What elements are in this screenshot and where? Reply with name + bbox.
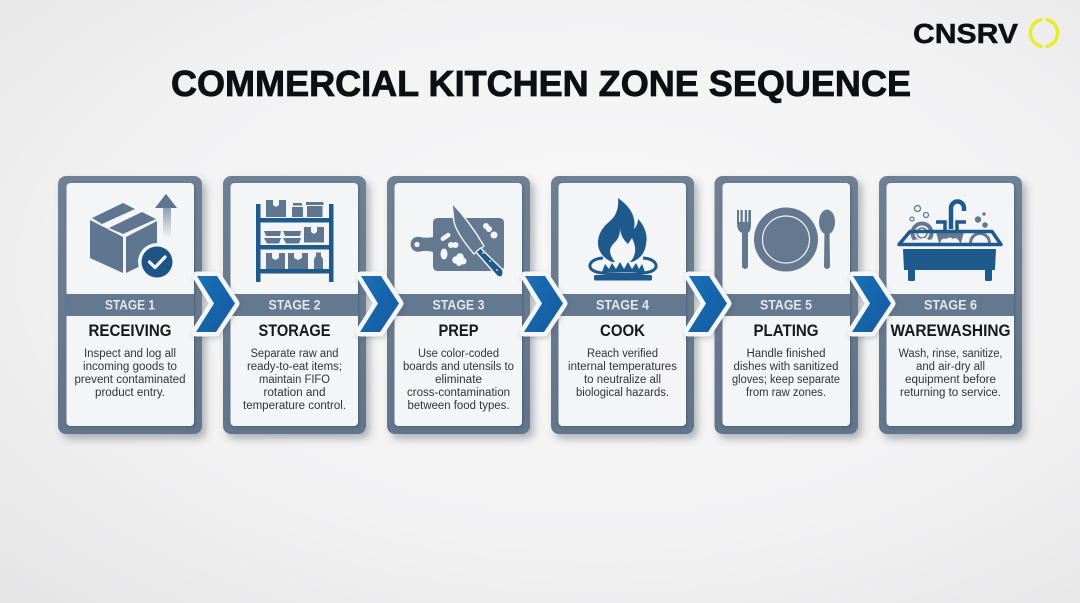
icon: plate fork and spoon	[737, 208, 835, 272]
card frame	[879, 176, 1022, 434]
arrow: stage 4 to 5	[688, 276, 727, 332]
stage label: STAGE 4	[596, 298, 649, 312]
panel: stage 4 cook	[551, 176, 694, 434]
card frame	[714, 176, 858, 434]
card frame	[387, 176, 530, 434]
description: biological hazards.	[576, 387, 669, 399]
card inner	[722, 183, 850, 426]
zone name: PREP	[438, 322, 478, 340]
logo wordmark: CNSRV	[913, 18, 1018, 49]
stage band	[722, 294, 850, 316]
card inner	[230, 183, 358, 426]
card inner	[886, 183, 1014, 426]
card frame	[551, 176, 694, 434]
stage label: STAGE 6	[924, 298, 977, 312]
panel: stage 1 receiving	[58, 176, 202, 434]
arrow: stage 2 to 3	[360, 276, 399, 332]
logo: CNSRV	[913, 18, 1058, 49]
description: product entry.	[95, 387, 165, 399]
stage band	[230, 294, 358, 316]
description: Wash, rinse, sanitize,	[898, 348, 1002, 360]
panel: stage 6 warewashing	[879, 176, 1022, 434]
stage band	[558, 294, 686, 316]
description: ready-to-eat items;	[247, 361, 342, 373]
description: cross-contamination	[407, 387, 510, 399]
arrow: stage 3 to 4	[524, 276, 563, 332]
description: Handle finished	[746, 348, 826, 360]
description: returning to service.	[900, 387, 1001, 399]
card inner	[394, 183, 522, 426]
zone name: STORAGE	[258, 322, 330, 340]
description	[403, 348, 514, 412]
description: dishes with sanitized	[734, 361, 838, 373]
icon: cutting board and knife	[411, 203, 504, 277]
stage band	[886, 294, 1014, 316]
description	[74, 348, 186, 399]
stage band	[66, 294, 194, 316]
description	[243, 348, 346, 412]
description: eliminate	[435, 374, 482, 386]
description: Reach verified	[587, 348, 658, 360]
description: prevent contaminated	[74, 374, 186, 386]
stage label: STAGE 1	[105, 298, 155, 312]
panel: stage 3 prep	[387, 176, 530, 434]
description	[568, 348, 677, 399]
icon: storage shelves	[256, 200, 334, 282]
stage label: STAGE 5	[760, 298, 812, 312]
description: gloves; keep separate	[732, 374, 840, 386]
card inner	[558, 183, 686, 426]
icon: package with check	[90, 194, 177, 281]
description: to neutralize all	[584, 374, 661, 386]
stage band	[394, 294, 522, 316]
card frame	[223, 176, 366, 434]
description: Separate raw and	[250, 348, 338, 360]
description: and air-dry all	[916, 361, 985, 373]
description: temperature control.	[243, 400, 346, 412]
description: incoming goods to	[83, 361, 177, 373]
card inner	[66, 183, 194, 426]
zone name: PLATING	[754, 322, 818, 340]
description: Inspect and log all	[84, 348, 176, 360]
description: equipment before	[905, 374, 996, 386]
description: from raw zones.	[746, 387, 826, 399]
zone name: COOK	[600, 322, 645, 340]
zone name: WAREWASHING	[890, 322, 1010, 340]
description: boards and utensils to	[403, 361, 514, 373]
arrow: stage 1 to 2	[196, 276, 235, 332]
card frame	[58, 176, 202, 434]
description: rotation and	[264, 387, 326, 399]
description: between food types.	[408, 400, 510, 412]
description	[732, 348, 840, 399]
logo ring	[1030, 20, 1058, 46]
description: Use color-coded	[418, 348, 499, 360]
icon: gas burner flame	[590, 198, 656, 280]
title: COMMERCIAL KITCHEN ZONE SEQUENCE	[171, 63, 911, 104]
description: internal temperatures	[568, 361, 677, 373]
zone name: RECEIVING	[88, 322, 172, 340]
icon: three-basin sink	[899, 202, 1001, 281]
arrow: stage 5 to 6	[852, 276, 891, 332]
description: maintain FIFO	[259, 374, 330, 386]
stage label: STAGE 2	[268, 298, 320, 312]
panel: stage 2 storage	[223, 176, 366, 434]
panel: stage 5 plating	[714, 176, 858, 434]
stage label: STAGE 3	[432, 298, 485, 312]
description	[898, 348, 1002, 399]
